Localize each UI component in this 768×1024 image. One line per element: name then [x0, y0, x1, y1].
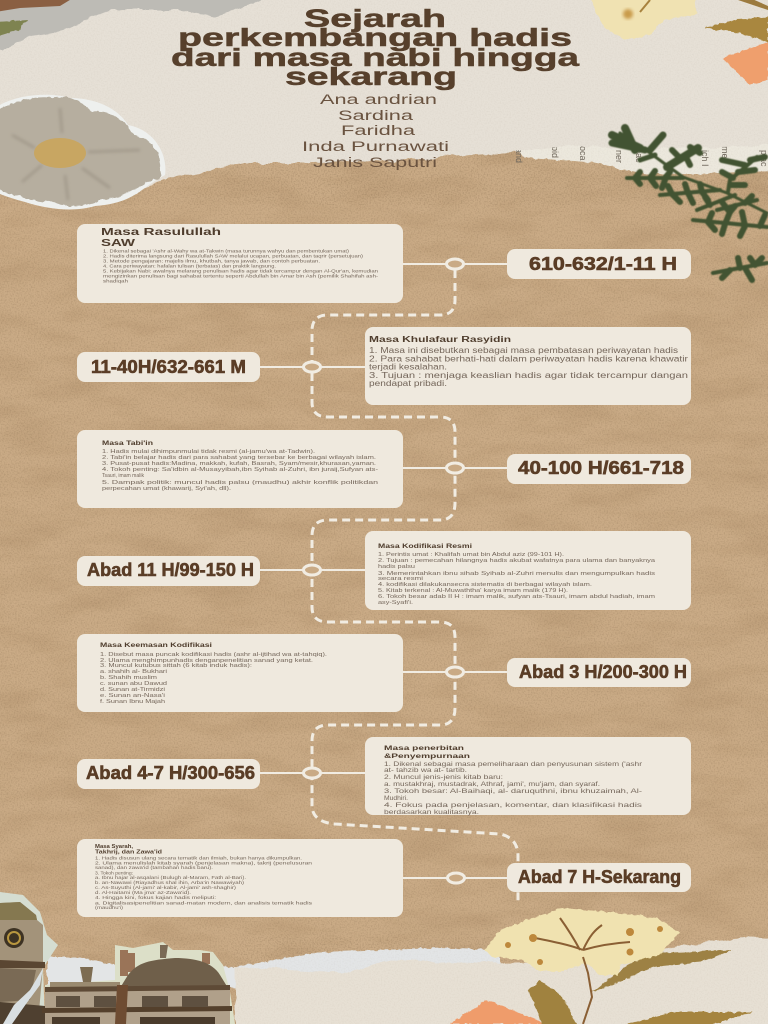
- label: Abad 4-7 H/300-656: Abad 4-7 H/300-656: [86, 763, 255, 783]
- panel: Masa Rasulullah SAW: 2. Hadis diterima langsung dari Rasulullah SAW melalui ucapan, perbuatan, dan taqrir (persetujuan): [103, 254, 364, 258]
- title: sekarang: [285, 63, 457, 91]
- author names: [302, 92, 449, 170]
- panel: Masa penerbitan & Penyempurnaan: 2. Muncul jenis-jenis kitab baru:: [384, 775, 503, 781]
- panel: Masa Kodifikasi Resmi: asy-Syafi'i.: [378, 600, 414, 606]
- panel: Masa penerbitan & Penyempurnaan: 1. Dikenal sebagai masa pemeliharaan dan penyusunan sistem ('ashr: [384, 762, 642, 768]
- decoration: book page strip: me: [720, 146, 730, 159]
- label: Abad 4-7 H/300-656: [77, 759, 260, 789]
- panel: Masa Syarah, Takhrij, dan Zawa'id: 2. Ulama menulislah kitab syarah (penjelasan makna), takrij (penelusuran: [95, 860, 312, 866]
- decoration: top-right pressed flowers, leaf and orange paper: [590, 0, 768, 85]
- decoration: book page strip: ner: [614, 150, 624, 163]
- panel: Masa Syarah, Takhrij, dan Zawa'id: (maudhu'i): [95, 905, 123, 911]
- panel: Masa Tabi'in: 4. Tokoh penting: Sa'idbin al-Musayyibah,ibn Syihab al-Zuhri, ibn juraij,Sufyan ats-: [102, 467, 378, 473]
- label: Abad 11 H/99-150 H: [77, 556, 260, 586]
- panel: Masa Syarah, Takhrij, dan Zawa'id: 4. Hingga kini, fokus kajian hadis meliputi:: [95, 895, 216, 901]
- label: 610-632/1-11 H: 610-632/1-11 H: [529, 254, 677, 274]
- panel: Masa Tabi'in: [77, 430, 403, 508]
- panel: Masa Khulafaur Rasyidin: Masa Khulafaur Rasyidin: [369, 335, 511, 344]
- panel: Masa penerbitan & Penyempurnaan: Mudhiri.: [384, 796, 408, 802]
- panel: Masa Tabi'in: 3. Pusat-pusat hadis:Madina, makkah, kufah, Basrah, Syam/mesir,khurasan,yaman.: [102, 461, 377, 467]
- panel: Masa Kodifikasi Resmi: [365, 531, 691, 610]
- panel: Masa Kodifikasi Resmi: 6. Tokoh besar adab II H : imam malik, sufyan ats-Tsauri, imam abdul hadiah, imam: [378, 594, 655, 600]
- panel: Masa Khulafaur Rasyidin: terjadi kesalahan.: [369, 362, 447, 372]
- panel: Masa penerbitan & Penyempurnaan: [365, 737, 691, 816]
- author names: Ana andrian: [320, 92, 437, 107]
- panel: Masa Keemasan Kodifikasi: f. Sunan Ibnu Majah: [100, 699, 165, 705]
- decoration: building collage: [0, 892, 235, 1024]
- panel: Masa penerbitan & Penyempurnaan: 4. Fokus pada penjelasan, komentar, dan klasifikasi hadis: [384, 803, 642, 809]
- top torn paper: [0, 0, 768, 205]
- panel: Masa Khulafaur Rasyidin: pendapat pribadi.: [369, 379, 447, 388]
- panel: Masa Syarah, Takhrij, dan Zawa'id: 3. Tokoh penting:: [95, 870, 133, 876]
- label: 11-40H/632-661 M: 11-40H/632-661 M: [91, 357, 246, 377]
- panel: Masa penerbitan & Penyempurnaan: berdasarkan kualitasnya.: [384, 810, 479, 816]
- panel: Masa Khulafaur Rasyidin: 1. Masa ini disebutkan sebagai masa pembatasan periwayatan hadis: [369, 346, 678, 355]
- panel: Masa Kodifikasi Resmi: 1. Perintis umat : Khalifah umat bin Abdul aziz (99-101 H).: [378, 552, 565, 558]
- panel: Masa Tabi'in: 5. Dampak politik: muncul hadis palsu (maudhu) akhir konflik politikdan: [102, 480, 378, 486]
- decoration: fern: [612, 128, 767, 280]
- panel: Masa Tabi'in: Tsauri, imam malik: [102, 473, 144, 479]
- panel: Masa Syarah, Takhrij, dan Zawa'id: [77, 839, 403, 917]
- author names: Janis Saputri: [313, 155, 437, 170]
- decoration: book page strip: pid: [550, 146, 560, 158]
- decoration: top-left torn grey paper and corner: [0, 0, 272, 50]
- panel: Masa Khulafaur Rasyidin: 2. Para sahabat berhati-hati dalam periwayatan hadis karena khawatir: [369, 354, 688, 364]
- label: Abad 7 H-Sekarang: Abad 7 H-Sekarang: [518, 867, 681, 887]
- panel: Masa Syarah, Takhrij, dan Zawa'id: 1. Hadis disusun ulang secara tematik dan ilmiah, bukan hanya dikumpulkan.: [95, 856, 302, 862]
- decoration: book page strip: ich I: [700, 150, 710, 167]
- decoration: left paper flower: [0, 95, 165, 209]
- panel: Masa Keemasan Kodifikasi: 3. Muncul kutubus sittah (6 kitab induk hadis):: [100, 663, 253, 669]
- panel: Masa Kodifikasi Resmi: Masa Kodifikasi Resmi: [378, 543, 472, 550]
- title: dari masa nabi hingga: [171, 44, 581, 72]
- panel: Masa Syarah, Takhrij, dan Zawa'id: c. As-Suyuthi (Al-jami' al-kabir, Al-jami' ash-shaghir): [95, 885, 236, 891]
- panel: Masa penerbitan & Penyempurnaan: &Penyempurnaan: [384, 753, 470, 760]
- author names: Inda Purnawati: [302, 139, 449, 154]
- panel: Masa Tabi'in: 1. Hadis mulai dihimpunmulai tidak resmi (al-jamu'wa at-Tadwin).: [102, 449, 316, 455]
- decoration: book page strip: and: [514, 148, 524, 163]
- panel: Masa Kodifikasi Resmi: hadis palsu: [378, 564, 415, 570]
- decoration: book page strip: [505, 135, 768, 174]
- decoration: book page strip: oca: [578, 146, 588, 161]
- panel: Masa penerbitan & Penyempurnaan: at- tahzib wa at- tartib.: [384, 768, 467, 774]
- panel: Masa Syarah, Takhrij, dan Zawa'id: Takhrij, dan Zawa'id: [95, 850, 163, 856]
- panel: Masa penerbitan & Penyempurnaan: a. mustakhraj, mustadrak, Athraf, jami', mu'jam, dan syaraf.: [384, 782, 600, 788]
- panel: Masa Rasulullah SAW: mengizinkan penulisan bagi sahabat tertentu seperti Abdullah bin Amar bin Ash (pemilik Shahifah ash-: [103, 274, 379, 278]
- panel: Masa Keemasan Kodifikasi: 2. Ulama menghimpunhadis denganpenelitian sanad yang ketat.: [100, 658, 314, 664]
- panel: Masa Rasulullah SAW: 5. Kebijakan Nabi: awalnya melarang penulisan hadis agar tidak tercampur dengan Al-Qur'an, kemudian: [103, 268, 379, 274]
- panel: Masa penerbitan & Penyempurnaan: Masa penerbitan: [384, 745, 464, 752]
- title: perkembangan hadis: [178, 24, 572, 52]
- panel: Masa Tabi'in: Masa Tabi'in: [102, 440, 153, 447]
- label: Abad 3 H/200-300 H: [507, 658, 691, 687]
- label: 11-40H/632-661 M: [77, 352, 260, 382]
- panel: Masa Kodifikasi Resmi: 2. Tujuan : pemecahan hilangnya hadis akubat wafatnya para ulama dan banyaknya: [378, 558, 656, 564]
- panel: Masa Keemasan Kodifikasi: a. shahih al- Bukhari: [100, 669, 167, 675]
- panel: Masa Keemasan Kodifikasi: e. Sunan an-Nasa'i: [100, 693, 165, 699]
- panel: Masa Rasulullah SAW: 4. Cara periwayatan: hafalan tulisan (terbatas) dan praktik langsung.: [103, 264, 276, 268]
- decoration: bottom pressed flower and leaves: [450, 908, 753, 1024]
- panel: Masa Keemasan Kodifikasi: 1. Disebut masa puncak kodifikasi hadis (ashr al-ijtihad wa at-tahqiq).: [100, 652, 328, 658]
- label: 40-100 H/661-718: [507, 454, 691, 484]
- panel: Masa Syarah, Takhrij, dan Zawa'id: a. Ibnu hajar al-asqalani (Bulugh al-Maram, Fath al-Bari).: [95, 875, 246, 881]
- panel: Masa penerbitan & Penyempurnaan: 3. Tokoh besar: Al-Baihaqi, al- daruquthni, ibnu khuzaimah, Al-: [384, 789, 642, 795]
- panel: Masa Rasulullah SAW: SAW: [101, 238, 136, 249]
- bottom torn paper: [47, 937, 768, 1024]
- decoration: book page strip: pac: [634, 148, 644, 163]
- panel: Masa Rasulullah SAW: Masa Rasulullah: [101, 227, 221, 238]
- label: Abad 11 H/99-150 H: Abad 11 H/99-150 H: [87, 560, 254, 580]
- panel: Masa Syarah, Takhrij, dan Zawa'id: a. Digitalisasipenelitian sanad-matan modern, dan analisis tematik hadis: [95, 900, 313, 906]
- label: 610-632/1-11 H: [507, 249, 691, 279]
- label: Abad 3 H/200-300 H: Abad 3 H/200-300 H: [519, 662, 687, 682]
- panel: Masa Rasulullah SAW: 1. Dikenal sebagai 'Ashr al-Wahy wa at-Takwin (masa turunnya wahyu dan pembentukan umat): [103, 248, 350, 254]
- panel: Masa Syarah, Takhrij, dan Zawa'id: Masa Syarah,: [95, 844, 133, 850]
- panel: Masa Keemasan Kodifikasi: d. Sunan at-Tirmidzi: [100, 687, 165, 693]
- panel: Masa Khulafaur Rasyidin: 3. Tujuan : menjaga keaslian hadis agar tidak tercampur dangan: [369, 371, 688, 380]
- panel: Masa Syarah, Takhrij, dan Zawa'id: sanad), dan zawa'id (tambahan hadis baru).: [95, 865, 213, 871]
- panel: Masa Kodifikasi Resmi: 4. kodifikasi dilakukansecra sistematis di berbagai wilayah islam.: [378, 582, 593, 588]
- title: Sejarah: [304, 5, 446, 33]
- panel: Masa Tabi'in: perpecahan umat (khawarij, Syi'ah, dll).: [102, 486, 232, 492]
- panel: Masa Kodifikasi Resmi: 5. Kitab terkenal : Al-Muwaththa' karya imam malik (179 H).: [378, 588, 569, 594]
- panel: Masa Rasulullah SAW: 3. Metode pengajaran: majelis ilmu, khutbah, tanya jawab, dan contoh perbuatan.: [103, 258, 320, 264]
- author names: Sardina: [338, 108, 414, 123]
- panel: Masa Syarah, Takhrij, dan Zawa'id: b. an-Nawawi (Riayadhus shal ihin, Arba'in Nawawiyah): [95, 880, 244, 886]
- title: [171, 5, 581, 91]
- panel: Masa Keemasan Kodifikasi: Masa Keemasan Kodifikasi: [100, 642, 212, 649]
- panel: Masa Kodifikasi Resmi: secara resmi: [378, 576, 423, 582]
- panel: Masa Syarah, Takhrij, dan Zawa'id: d. Al-Haitami (Ma jma' az-Zawa'id).: [95, 890, 191, 896]
- timeline connector: [260, 259, 518, 903]
- panel: Masa Rasulullah SAW: shadiqah: [103, 278, 129, 284]
- panel: Masa Keemasan Kodifikasi: b. Shahih muslim: [100, 675, 157, 681]
- panel: Masa Kodifikasi Resmi: 3. Memerintahkan ibnu sihab Syihab al-Zuhri menulis dan mengumpulkan hadis: [378, 571, 655, 577]
- panel: Masa Tabi'in: 2. Tabi'in belajar hadis dari para sahabat yang tersebar ke berbagai wilayah islam.: [102, 455, 377, 461]
- label: 40-100 H/661-718: 40-100 H/661-718: [518, 458, 684, 478]
- author names: Faridha: [341, 123, 416, 138]
- panel: Masa Rasulullah SAW: [77, 224, 403, 303]
- panel: Masa Khulafaur Rasyidin: [365, 327, 691, 405]
- label: Abad 7 H-Sekarang: [507, 863, 691, 892]
- panel: Masa Keemasan Kodifikasi: [77, 634, 403, 712]
- panel: Masa Keemasan Kodifikasi: c. sunan abu Dawud: [100, 681, 167, 687]
